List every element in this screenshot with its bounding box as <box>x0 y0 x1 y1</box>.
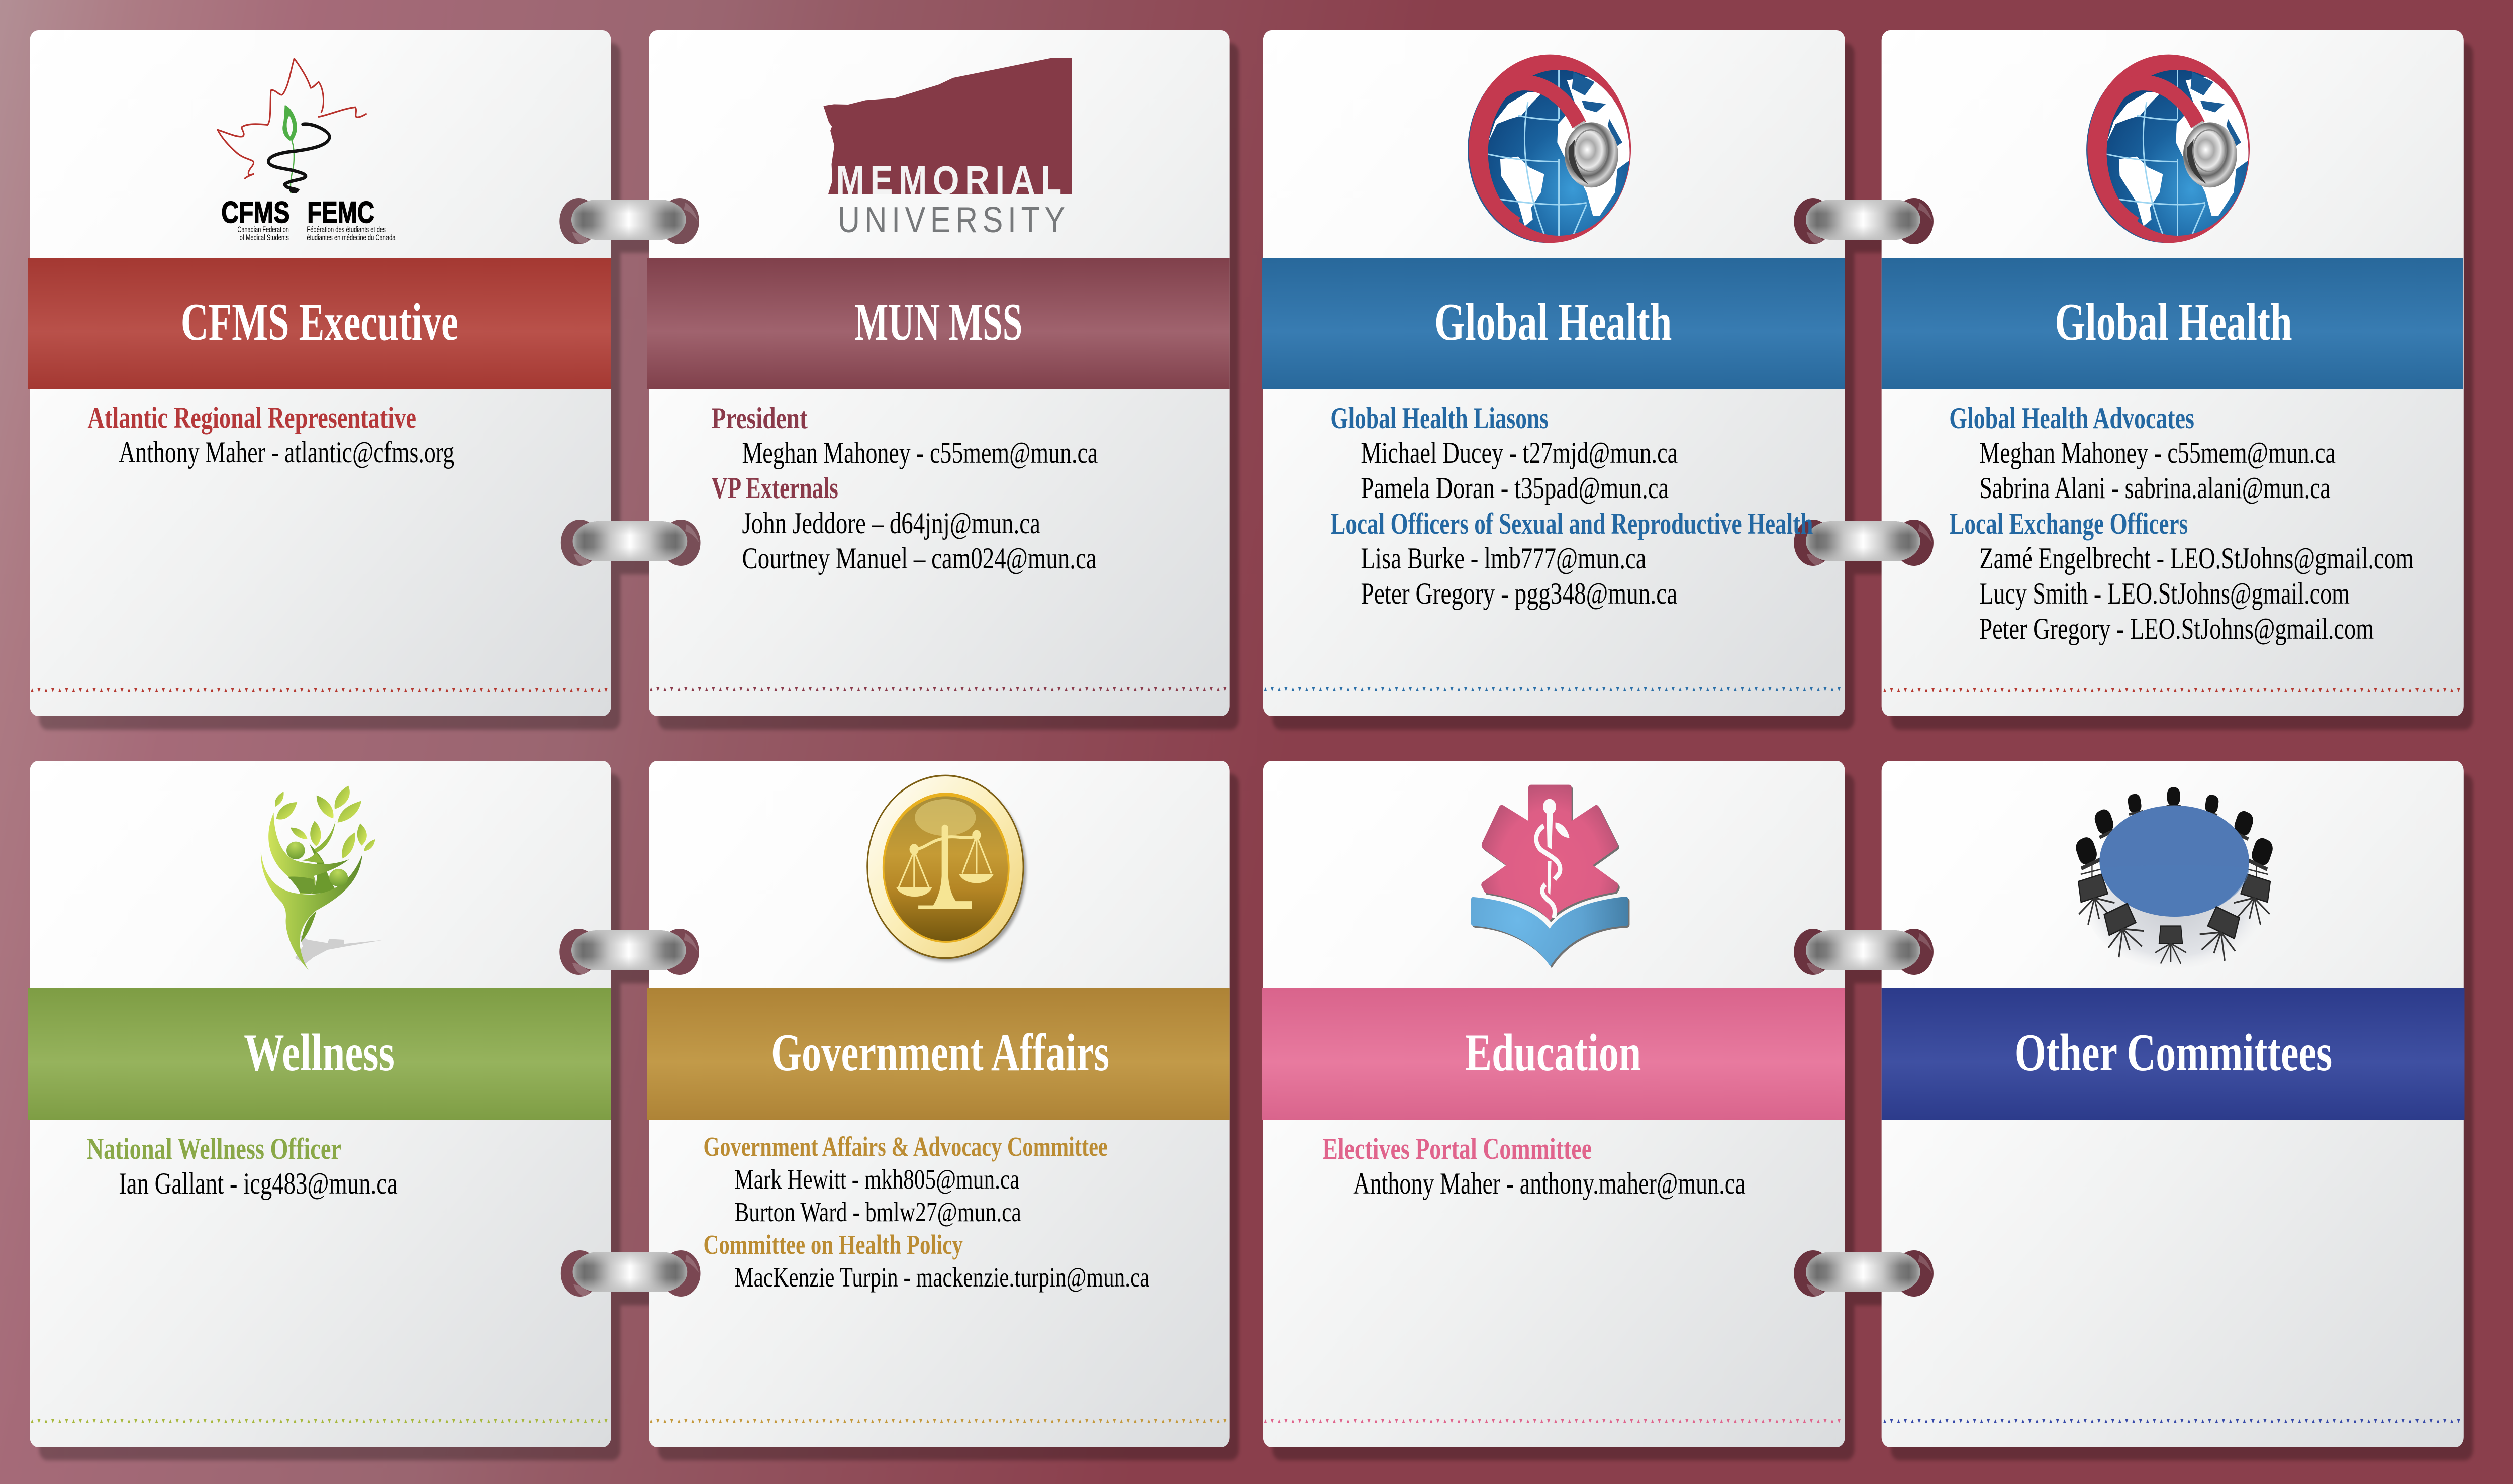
header band: CFMS Executive <box>28 258 611 389</box>
header band: Wellness <box>28 988 611 1120</box>
header band: Global Health <box>1262 258 1845 389</box>
text block: CFMS Executive contacts <box>87 401 454 469</box>
icon: gold scales of justice badge <box>867 775 1026 961</box>
text block: MUN MSS contacts: Courtney Manuel – cam024@mun.ca <box>742 542 1097 575</box>
text block: Education contacts <box>1322 1132 1746 1201</box>
text block: Global Health advocate contacts: Peter Gregory - LEO.StJohns@gmail.com <box>1979 612 2374 646</box>
text block: Global Health liaison contacts: Michael Ducey - t27mjd@mun.ca <box>1361 436 1678 470</box>
icon: Memorial University logo: UNIVERSITY <box>838 200 1065 240</box>
text block: Education contacts: Electives Portal Committee <box>1322 1132 1592 1166</box>
text block: Government Affairs contacts: MacKenzie Turpin - mackenzie.turpin@mun.ca <box>734 1263 1150 1293</box>
text block: Wellness contacts: Ian Gallant - icg483@mun.ca <box>119 1167 398 1201</box>
heading: Government Affairs: Government Affairs <box>771 1023 1109 1082</box>
icon: CFMS FEMC logo: CFMS <box>221 195 290 229</box>
text block: MUN MSS contacts: VP Externals <box>712 471 838 505</box>
icon: globe with stethoscope <box>2086 55 2250 243</box>
text block: Government Affairs contacts: Burton Ward - bmlw27@mun.ca <box>734 1198 1021 1228</box>
text block: Government Affairs contacts: Government Affairs & Advocacy Committee <box>703 1132 1108 1162</box>
text block: MUN MSS contacts: John Jeddore – d64jnj@mun.ca <box>742 507 1040 540</box>
text block: CFMS Executive contacts: Atlantic Regional Representative <box>87 401 416 435</box>
panel: Government Affairs <box>647 761 1230 1447</box>
header band: Government Affairs <box>647 988 1230 1120</box>
header band: Global Health <box>1882 258 2463 389</box>
icon: green leaf figures <box>261 785 383 970</box>
icon: round conference table with chairs <box>2072 787 2276 968</box>
text block: CFMS Executive contacts: Anthony Maher - atlantic@cfms.org <box>119 436 454 469</box>
icon: Memorial University logo: MEMORIAL <box>836 158 1061 203</box>
icon: CFMS FEMC logo: Canadian Federation <box>237 225 289 234</box>
text block: MUN MSS contacts: Meghan Mahoney - c55mem@mun.ca <box>742 436 1098 470</box>
text block: Education contacts: Anthony Maher - anthony.maher@mun.ca <box>1353 1167 1746 1201</box>
binder rings: top row left gap <box>559 198 700 566</box>
panel: Education <box>1262 761 1845 1447</box>
text block: Global Health advocate contacts: Zamé Engelbrecht - LEO.StJohns@gmail.com <box>1979 542 2414 575</box>
text block: Global Health liaison contacts: Local Officers of Sexual and Reproductive Health <box>1330 507 1813 541</box>
text block: Global Health advocate contacts: Lucy Smith - LEO.StJohns@gmail.com <box>1979 577 2350 611</box>
text block: Global Health advocate contacts: Sabrina Alani - sabrina.alani@mun.ca <box>1979 471 2331 505</box>
text block: Government Affairs contacts: Committee on Health Policy <box>703 1230 963 1260</box>
text block: Global Health liaison contacts: Pamela Doran - t35pad@mun.ca <box>1361 471 1669 505</box>
icon: Memorial University logo <box>823 58 1072 240</box>
text block: Global Health liaison contacts: Global Health Liasons <box>1330 402 1549 435</box>
text block: Global Health liaison contacts: Lisa Burke - lmb777@mun.ca <box>1361 542 1646 575</box>
panel: Global Health liaisons <box>1262 30 1845 716</box>
text block: Global Health advocate contacts: Local Exchange Officers <box>1949 507 2188 541</box>
text block: Wellness contacts: National Wellness Officer <box>87 1132 341 1166</box>
text block: Global Health advocate contacts: Meghan Mahoney - c55mem@mun.ca <box>1979 436 2336 470</box>
panel: Other Committees <box>1882 761 2464 1447</box>
heading: MUN MSS: MUN MSS <box>854 292 1022 352</box>
icon: CFMS FEMC logo: FEMC <box>307 195 374 229</box>
text block: Global Health advocate contacts: Global Health Advocates <box>1949 402 2194 435</box>
binder rings: bottom row right gap <box>1794 929 1934 1297</box>
heading: Global Health: Global Health <box>2055 292 2292 352</box>
text block: Global Health liaison contacts <box>1330 402 1813 611</box>
panel: MUN MSS <box>647 30 1230 716</box>
icon: CFMS FEMC logo: Fédération des étudiants et des <box>307 225 386 234</box>
text block: Wellness contacts <box>87 1132 398 1201</box>
icon: globe with stethoscope <box>1468 55 1631 243</box>
header band: Other Committees <box>1882 988 2464 1120</box>
text block: Government Affairs contacts <box>703 1132 1150 1293</box>
text block: MUN MSS contacts: President <box>712 402 808 435</box>
icon: CFMS FEMC logo <box>218 59 396 242</box>
text block: Global Health advocate contacts <box>1949 402 2414 646</box>
panel: Global Health advocates <box>1882 30 2464 716</box>
heading: Other Committees: Other Committees <box>2015 1023 2332 1082</box>
binder rings: top row right gap <box>1794 198 1934 566</box>
text block: Government Affairs contacts: Mark Hewitt - mkh805@mun.ca <box>734 1165 1019 1195</box>
heading: CFMS Executive: CFMS Executive <box>181 292 458 352</box>
heading: Education: Education <box>1465 1023 1641 1082</box>
header band: MUN MSS <box>647 258 1230 389</box>
text block: MUN MSS contacts <box>712 402 1098 575</box>
heading: Wellness: Wellness <box>244 1023 395 1082</box>
binder rings: bottom row left gap <box>559 929 700 1297</box>
heading: Global Health: Global Health <box>1434 292 1672 352</box>
panel: Wellness <box>28 761 611 1447</box>
icon: CFMS FEMC logo: étudiantes en médecine du Canada <box>307 233 396 242</box>
icon: CFMS FEMC logo: of Medical Students <box>240 233 289 242</box>
header band: Education <box>1262 988 1845 1120</box>
icon: star of life over open book <box>1471 785 1629 968</box>
panel: CFMS Executive <box>28 30 611 716</box>
text block: Global Health liaison contacts: Peter Gregory - pgg348@mun.ca <box>1361 577 1677 611</box>
